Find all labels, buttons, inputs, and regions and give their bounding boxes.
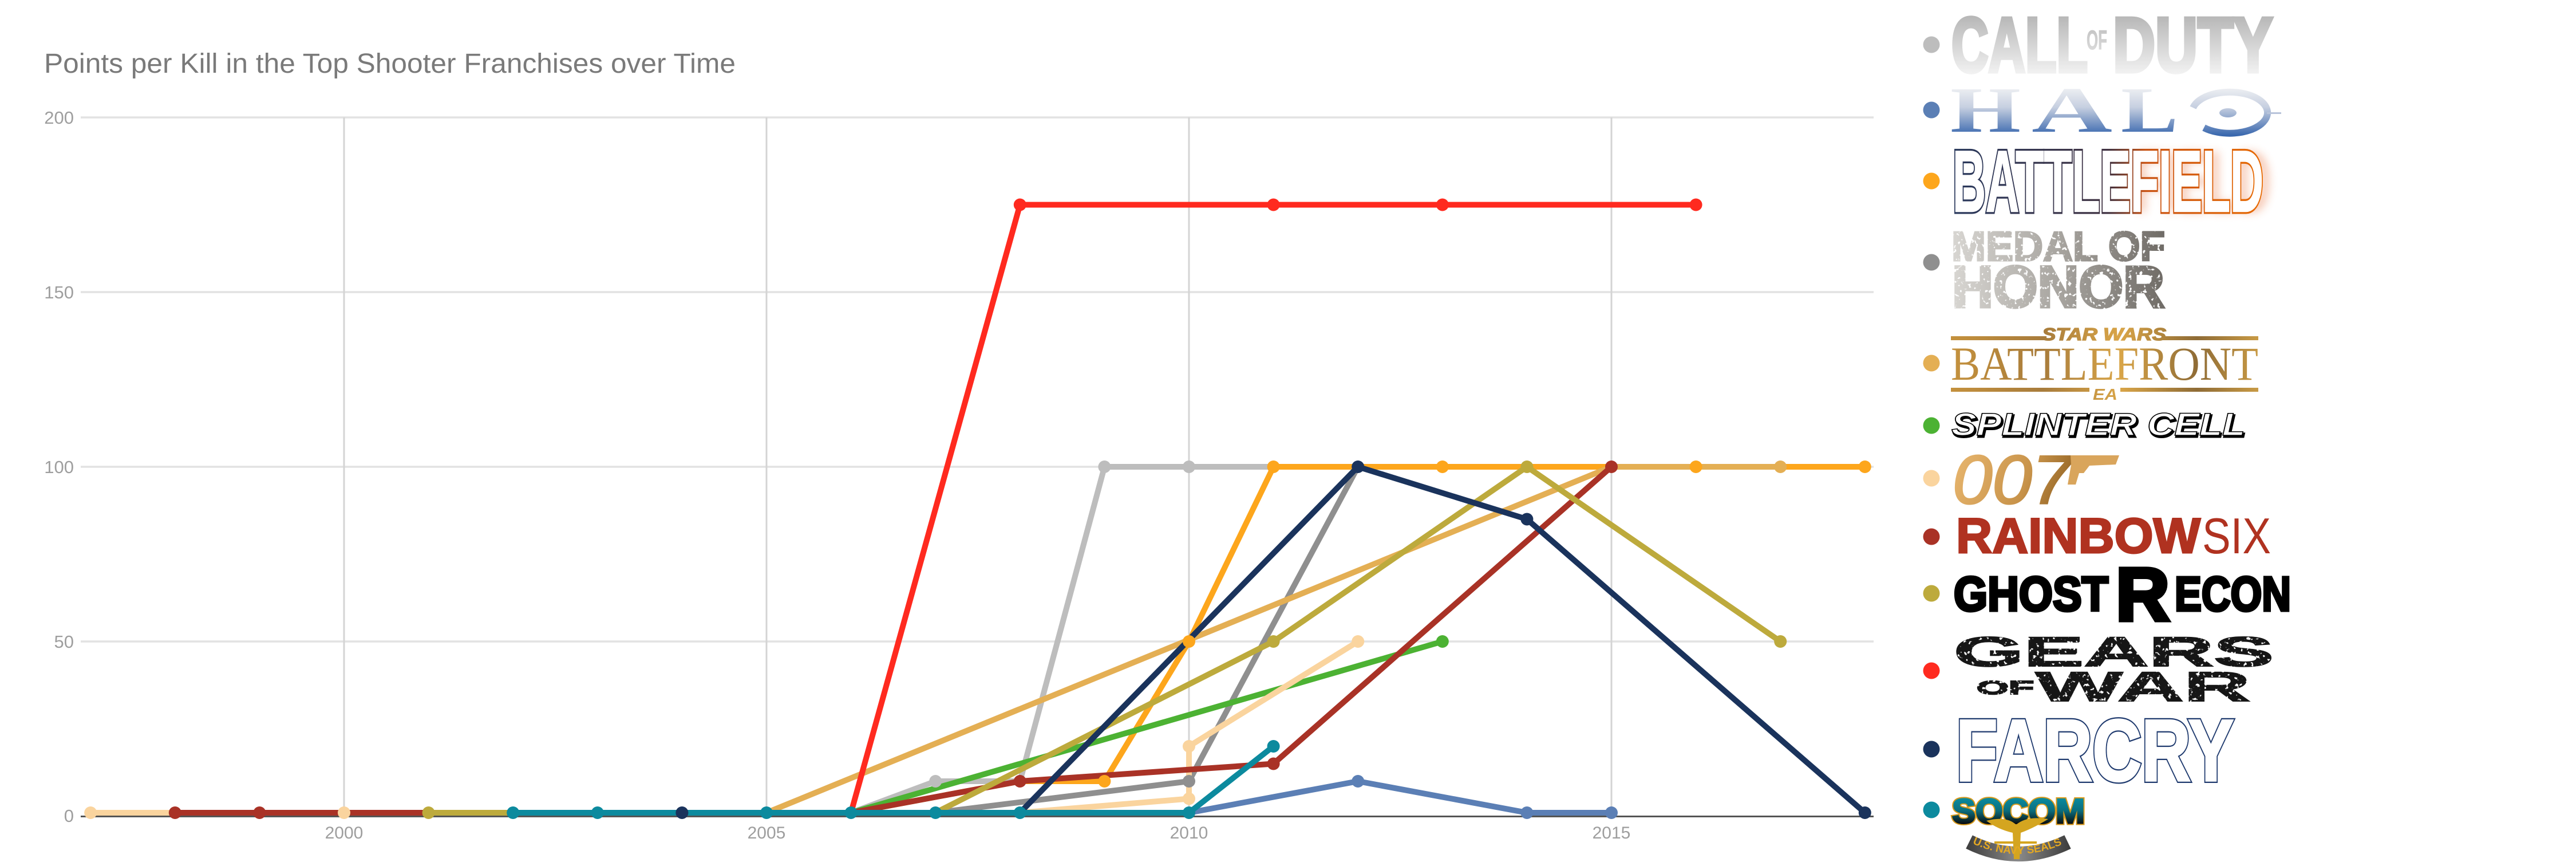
markers: Call of Duty: [929, 460, 1195, 788]
logo: Star Wars Battlefront: STAR WARS: [2042, 324, 2166, 344]
x axis labels: 2000: [325, 824, 363, 843]
markers: Far Cry: [675, 460, 1871, 819]
line: 007: [90, 641, 1358, 813]
markers: Halo: [1352, 775, 1618, 819]
markers: Medal of Honor: [1183, 775, 1195, 788]
logo: Gears of War: [1954, 629, 2274, 710]
logo: Medal of Honor: MEDAL: [1951, 224, 2098, 270]
logo: Splinter Cell: SPLINTER CELL: [1951, 406, 2245, 442]
logo: Halo: L: [2121, 74, 2178, 146]
line: Battlefield: [851, 467, 1865, 813]
logo: Ghost Recon: R: [2116, 552, 2170, 636]
line: Rainbow Six: [175, 467, 1611, 813]
y axis labels: [44, 108, 74, 826]
y axis labels: 100: [44, 457, 74, 477]
logo: SOCOM: [1951, 792, 2085, 861]
line: Splinter Cell: [682, 641, 1443, 813]
x axis labels: 2005: [748, 824, 785, 843]
logo: Star Wars Battlefront: BATTLEFRONT: [1951, 337, 2258, 390]
logo: Splinter Cell: SPLINTER CELL: [1953, 408, 2246, 444]
logo: Call of Duty: DUTY: [2113, 2, 2273, 88]
legend item: Ghost Recon: [1923, 552, 2291, 636]
logo: Ghost Recon: GHOST: [1954, 567, 2108, 621]
logo: Star Wars Battlefront: [1951, 324, 2258, 403]
markers: Splinter Cell: [1436, 635, 1449, 648]
logo: 007: [1953, 442, 2119, 518]
logo: Gears of War: WAR: [2036, 664, 2250, 710]
legend item: Splinter Cell: [1923, 406, 2246, 444]
markers: Ghost Recon: [422, 460, 1787, 819]
line: Gears of War: [851, 205, 1696, 813]
logo: Medal of Honor: [1951, 224, 2165, 320]
logo: Ghost Recon: [1954, 552, 2291, 636]
markers: Rainbow Six: [169, 460, 1618, 819]
logo: Battlefield: [1953, 133, 2270, 231]
y axis labels: 200: [44, 108, 74, 128]
line: Halo: [513, 781, 1611, 813]
markers: 007: [84, 635, 1364, 819]
y axis labels: 150: [44, 282, 74, 302]
line: Ghost Recon: [429, 467, 1780, 813]
logo: Gears of War: GEARS: [1954, 629, 2274, 675]
logo: Rainbow Six: SIX: [2202, 507, 2271, 564]
logo: Call of Duty: OF: [2087, 25, 2107, 55]
legend item: Star Wars Battlefront: [1923, 324, 2258, 403]
y axis labels: 0: [64, 806, 74, 826]
markers: Gears of War: [1014, 198, 1702, 211]
line chart: [44, 108, 1874, 843]
legend item: 007: [1923, 442, 2119, 518]
legend item: Call of Duty: [1923, 2, 2273, 88]
markers: SOCOM: [507, 740, 1280, 819]
title: Points per Kill in the Top Shooter Franchises over Time: [44, 49, 736, 79]
legend item: Halo: [1923, 74, 2281, 146]
legend item: Gears of War: [1923, 629, 2274, 710]
markers: Battlefield: [1098, 460, 1871, 788]
line: Far Cry: [682, 467, 1865, 813]
legend item: SOCOM: [1923, 792, 2085, 861]
logo: SOCOM: SOCOM: [1952, 792, 2085, 830]
line: Medal of Honor: [851, 467, 1358, 813]
logo: Battlefield: FIELD: [2135, 133, 2270, 231]
line: SOCOM: [513, 746, 1274, 813]
legend item: Rainbow Six: [1923, 507, 2271, 564]
logo: SOCOM: SOCOM: [1952, 792, 2085, 830]
logo: SOCOM: U.S. NAVY SEALS: [1974, 837, 2061, 854]
legend item: Far Cry: [1923, 702, 2234, 800]
legend item: Medal of Honor: [1923, 224, 2165, 320]
logo: Call of Duty: [1951, 2, 2273, 88]
logo: Call of Duty: CALL: [1951, 2, 2088, 88]
x axis labels: [325, 824, 1630, 843]
logo: Rainbow Six: RAINBOW: [1956, 509, 2201, 564]
x axis labels: 2010: [1170, 824, 1208, 843]
logo: Far Cry: FARCRY: [1956, 702, 2234, 800]
logo: Ghost Recon: ECON: [2175, 567, 2291, 621]
legend item: Battlefield: [1923, 133, 2270, 231]
legend: [1923, 2, 2291, 861]
markers: Battlefront: [1774, 460, 1787, 473]
logo: 007: 007: [1953, 442, 2074, 518]
logo: Star Wars Battlefront: EA: [2093, 385, 2117, 403]
logo: Far Cry: FARCRY: [1956, 702, 2234, 800]
logo: Gears of War: OF: [1977, 677, 2034, 698]
logo: Halo: A: [2032, 74, 2112, 146]
logo: Halo: H: [1950, 74, 2021, 146]
x axis labels: 2015: [1593, 824, 1630, 843]
logo: Battlefield: BATTLEFIELD: [1953, 133, 2263, 230]
logo: Battlefield: BATTLEFIELD: [1953, 133, 2263, 230]
logo: Halo: [1950, 74, 2281, 146]
line: Call of Duty: [598, 467, 1865, 813]
logo: Medal of Honor: HONOR: [1952, 254, 2164, 320]
y axis labels: 50: [54, 632, 74, 652]
logo: Medal of Honor: OF: [2108, 224, 2165, 270]
line: Battlefront: [682, 467, 1780, 813]
